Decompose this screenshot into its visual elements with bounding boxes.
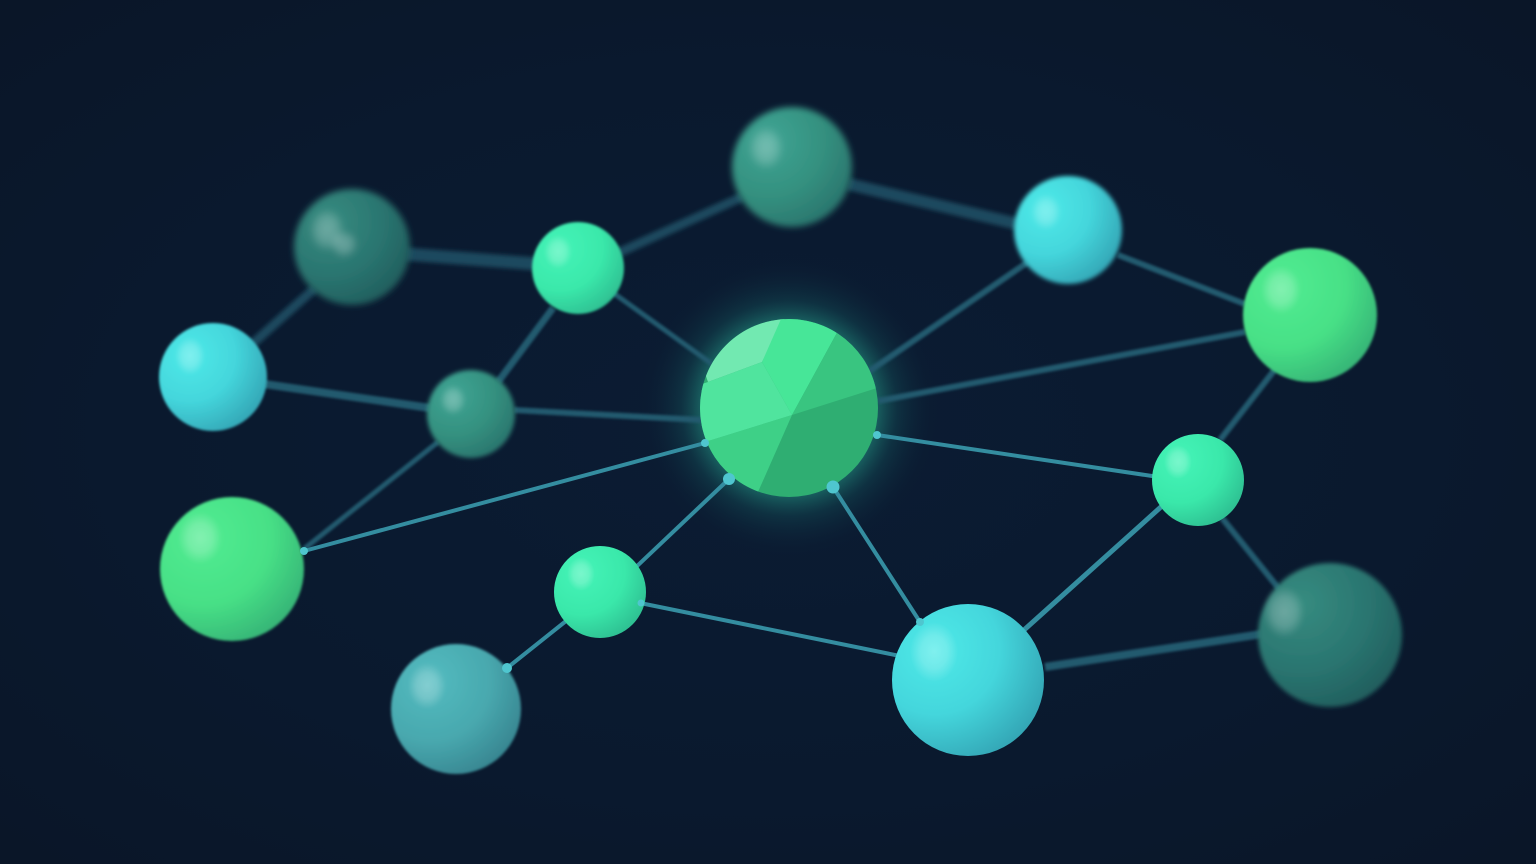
node: lower-right dark teal: [1258, 563, 1402, 707]
node: lower mint: [554, 546, 646, 638]
network diagram: [156, 102, 1404, 776]
node: right green: [1243, 248, 1377, 382]
central faceted hub: [700, 319, 878, 497]
node: top muted teal: [732, 107, 852, 227]
hub glow: [639, 258, 939, 558]
node: upper-left dark teal: [294, 189, 410, 305]
far connections: [250, 184, 1018, 346]
node: left cyan: [159, 323, 267, 431]
mid connections: [264, 255, 1280, 667]
node: bottom cyan: [892, 604, 1044, 756]
node: small dark teal: [427, 370, 515, 458]
node: bottom steel teal: [391, 644, 521, 774]
near connections: [304, 435, 1162, 668]
connector dots: [300, 431, 924, 673]
node: right mint: [1152, 434, 1244, 526]
node: upper mint: [532, 222, 624, 314]
node: lower-left green: [160, 497, 304, 641]
node: upper-right cyan: [1014, 176, 1122, 284]
